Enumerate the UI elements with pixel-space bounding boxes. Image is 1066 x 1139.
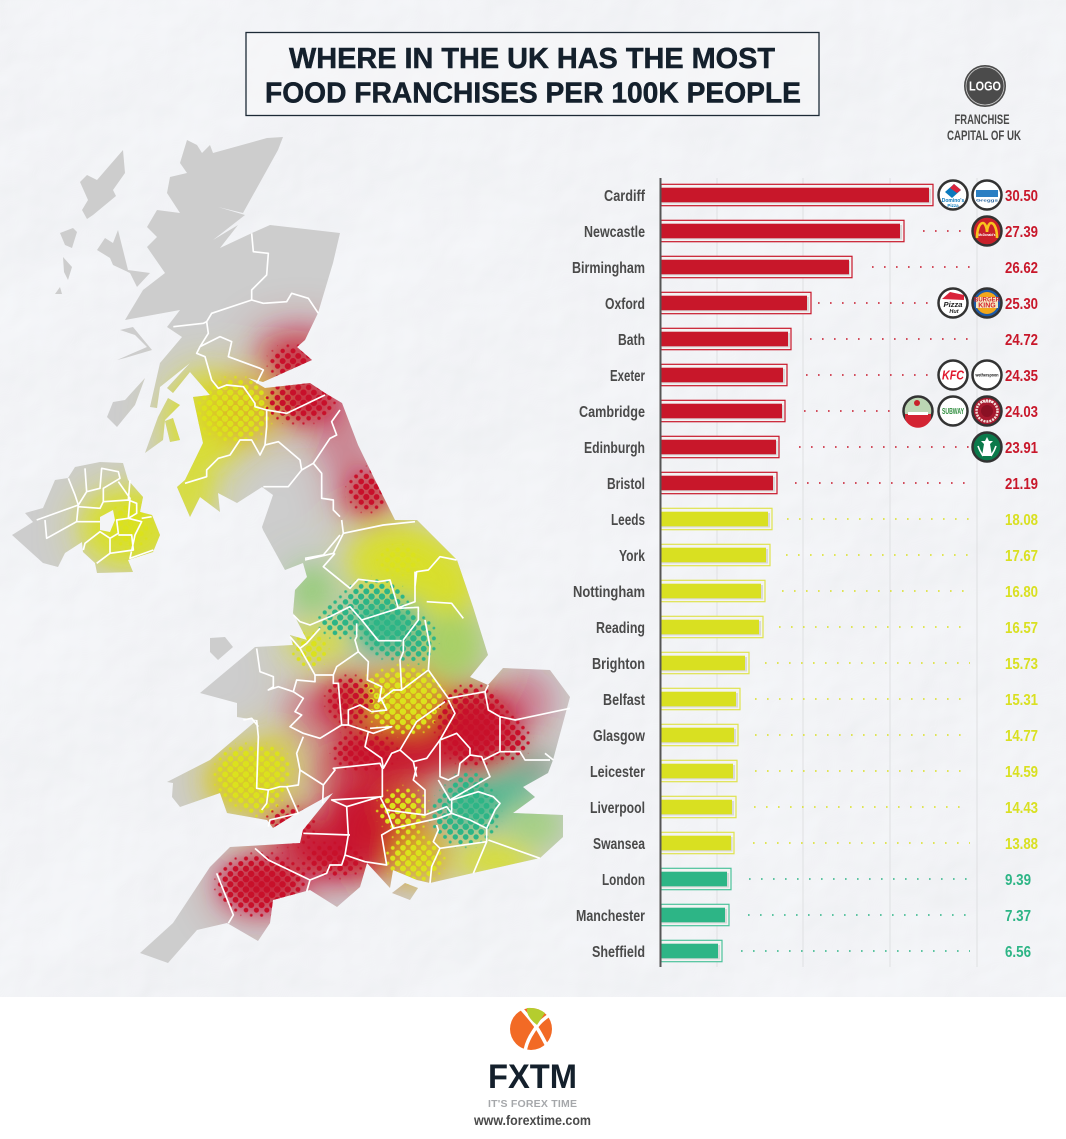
footer logo: FXTM: FXTM bbox=[488, 1058, 577, 1096]
row: Manchester: 7.37 bbox=[1005, 908, 1031, 925]
icon: Pizza Hut bbox=[938, 288, 968, 318]
row: Birmingham: 26.62 bbox=[1005, 260, 1038, 277]
row: York: 17.67 bbox=[1005, 548, 1038, 565]
row: Manchester bbox=[576, 904, 1031, 926]
legend: franchise capital logo: LOGO bbox=[969, 78, 1001, 94]
icon: Costa Coffee bbox=[972, 396, 1002, 426]
row: Reading bbox=[596, 616, 1038, 638]
row: Swansea: 13.88 bbox=[1005, 836, 1038, 853]
icon: Starbucks bbox=[972, 432, 1002, 462]
row: Oxford bbox=[605, 292, 1038, 314]
row: London: London bbox=[602, 872, 645, 889]
icon: KFC bbox=[938, 360, 968, 390]
row: Cardiff: 30.50 bbox=[1005, 188, 1038, 205]
row: Birmingham bbox=[572, 256, 1038, 278]
row: Leicester bbox=[590, 760, 1038, 782]
row: Cardiff: Cardiff bbox=[604, 188, 646, 205]
footer logo: FXTM: IT'S FOREX TIME bbox=[488, 1098, 577, 1110]
row: Sheffield: Sheffield bbox=[592, 944, 645, 961]
row: Edinburgh: Edinburgh bbox=[584, 440, 645, 457]
icon: McDonald's: McDonald's bbox=[978, 233, 996, 237]
row: Edinburgh bbox=[584, 436, 1038, 458]
icon: pub chain bbox=[904, 396, 932, 428]
icon: Burger King: KING bbox=[978, 302, 996, 310]
row: Bath bbox=[618, 328, 1038, 350]
row: Bath: 24.72 bbox=[1005, 332, 1038, 349]
row: Brighton: Brighton bbox=[592, 656, 645, 673]
row: Glasgow: Glasgow bbox=[593, 728, 645, 745]
row: Cambridge: Cambridge bbox=[579, 404, 645, 421]
row: Reading: Reading bbox=[596, 620, 645, 637]
row: Bristol: 21.19 bbox=[1005, 476, 1038, 493]
icon: FXTM mark bbox=[510, 1006, 552, 1052]
icon: Domino's: Domino's bbox=[942, 198, 965, 204]
county borders england and wales bbox=[217, 520, 570, 923]
row: Manchester: Manchester bbox=[576, 908, 645, 925]
borders scotland and northern ireland bbox=[37, 233, 340, 563]
row: Oxford: Oxford bbox=[605, 296, 645, 313]
chart axis bbox=[660, 178, 662, 967]
bar chart bbox=[572, 178, 1038, 967]
icon: Wetherspoon: wetherspoon bbox=[975, 372, 999, 378]
legend: franchise capital logo bbox=[947, 64, 1021, 143]
row: Sheffield: 6.56 bbox=[1005, 944, 1031, 961]
icon: Costa Coffee: COSTA bbox=[981, 400, 993, 404]
row: Belfast: 15.31 bbox=[1005, 692, 1038, 709]
icon: Domino's bbox=[938, 180, 968, 210]
row: Exeter: Exeter bbox=[610, 368, 645, 385]
row: Belfast: Belfast bbox=[603, 692, 646, 709]
row: Leeds: Leeds bbox=[611, 512, 645, 529]
row: Liverpool: Liverpool bbox=[590, 800, 645, 817]
footer logo: FXTM bbox=[473, 1006, 591, 1128]
icon: Pizza Hut: Pizza bbox=[944, 302, 963, 309]
row: Newcastle: Newcastle bbox=[584, 224, 645, 241]
title box: WHERE IN THE UK HAS THE MOST bbox=[289, 43, 775, 75]
footer panel bbox=[0, 997, 1066, 1139]
row: Belfast bbox=[603, 688, 1038, 710]
row: Swansea: Swansea bbox=[593, 836, 645, 853]
icon: Pizza Hut: Hut bbox=[949, 309, 960, 315]
row: Birmingham: Birmingham bbox=[572, 260, 645, 277]
icon: Subway: SUBWAY bbox=[942, 407, 964, 416]
row: York bbox=[619, 544, 1038, 566]
icon: Domino's: Pizza bbox=[947, 203, 959, 208]
row: Oxford: 25.30 bbox=[1005, 296, 1038, 313]
row: Liverpool: 14.43 bbox=[1005, 800, 1038, 817]
row: London: 9.39 bbox=[1005, 872, 1031, 889]
row: Edinburgh: 23.91 bbox=[1005, 440, 1038, 457]
row: Leeds bbox=[611, 508, 1038, 530]
icon: Burger King: BURGER bbox=[974, 298, 1001, 304]
legend: franchise capital logo: FRANCHISE bbox=[954, 111, 1010, 127]
row: Brighton: 15.73 bbox=[1005, 656, 1038, 673]
icon: McDonald's bbox=[972, 216, 1002, 246]
lough neagh bbox=[100, 510, 115, 532]
row: Cambridge: 24.03 bbox=[1005, 404, 1038, 421]
icon: Subway bbox=[938, 396, 968, 426]
row: Nottingham bbox=[573, 580, 1038, 602]
row: Exeter: 24.35 bbox=[1005, 368, 1038, 385]
legend: franchise capital logo: CAPITAL OF UK bbox=[947, 127, 1021, 143]
icon: Wetherspoon bbox=[972, 360, 1002, 390]
row: Cardiff bbox=[604, 184, 1038, 206]
row: Bristol: Bristol bbox=[607, 476, 645, 493]
title box: FOOD FRANCHISES PER 100K PEOPLE bbox=[265, 78, 801, 110]
icon: Burger King bbox=[972, 288, 1002, 318]
row: York: York bbox=[619, 548, 645, 565]
row: Bristol bbox=[607, 472, 1038, 494]
row: Glasgow bbox=[593, 724, 1038, 746]
icon: Greggs bbox=[972, 180, 1002, 210]
row: Newcastle: 27.39 bbox=[1005, 224, 1038, 241]
row: London bbox=[602, 868, 1031, 890]
row: Sheffield bbox=[592, 940, 1031, 962]
row: Brighton bbox=[592, 652, 1038, 674]
row: Nottingham: Nottingham bbox=[573, 584, 645, 601]
row: Leicester: 14.59 bbox=[1005, 764, 1038, 781]
footer logo: FXTM: www.forextime.com bbox=[473, 1112, 591, 1128]
title box bbox=[246, 32, 819, 116]
row: Newcastle bbox=[584, 220, 1038, 242]
row: Leeds: 18.08 bbox=[1005, 512, 1038, 529]
row: Cambridge bbox=[579, 400, 1038, 422]
row: Reading: 16.57 bbox=[1005, 620, 1038, 637]
row: Swansea bbox=[593, 832, 1038, 854]
row: Exeter bbox=[610, 364, 1038, 386]
row: Glasgow: 14.77 bbox=[1005, 728, 1038, 745]
row: Bath: Bath bbox=[618, 332, 645, 349]
franchise logos bbox=[904, 180, 1002, 462]
icon: KFC: KFC bbox=[942, 368, 965, 382]
icon: Greggs: Greggs bbox=[976, 198, 999, 202]
map of UK bbox=[0, 120, 600, 980]
row: Nottingham: 16.80 bbox=[1005, 584, 1038, 601]
row: Liverpool bbox=[590, 796, 1038, 818]
row: Leicester: Leicester bbox=[590, 764, 645, 781]
